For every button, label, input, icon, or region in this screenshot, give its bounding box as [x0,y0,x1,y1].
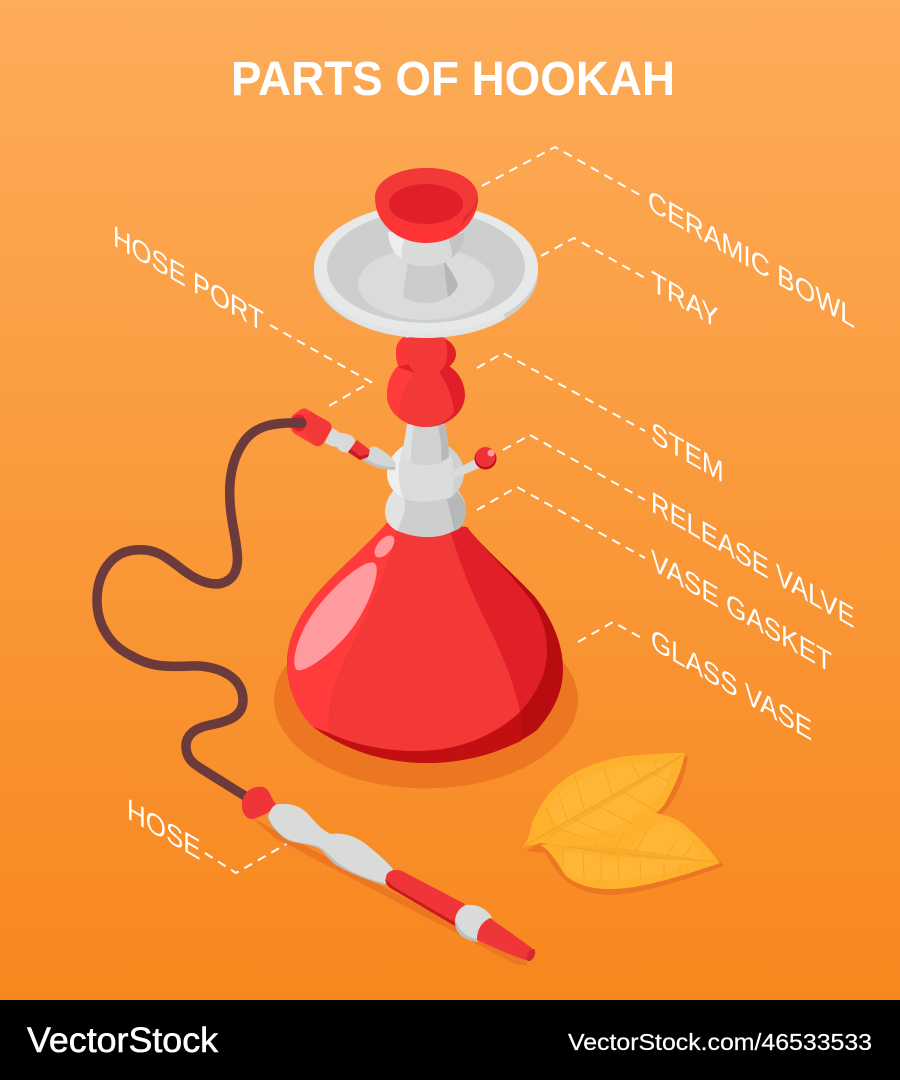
leaf shadows [526,756,724,895]
stem: red upper bulb [396,334,456,374]
vase gasket [385,488,466,537]
footer logo: VectorStock [27,1021,219,1060]
lower leaf [540,813,720,889]
label: ceramic bowl [482,147,855,336]
label: vase gasket [477,487,832,681]
stem: upper silver neck [403,424,449,465]
ceramic bowl [375,168,478,243]
label: tray: TRAY [651,265,719,336]
bowl cup [388,232,465,266]
tray [314,204,538,338]
stem: middle silver ball [387,446,464,502]
footer image id: VectorStock.com/46533533 [568,1029,872,1055]
mouthpiece [242,787,537,966]
label: glass vase [578,622,812,748]
label: ceramic bowl: CERAMIC BOWL [648,184,855,336]
lower leaf midrib band [565,846,705,860]
title: PARTS OF HOOKAH [231,53,675,106]
label: hose port [113,220,371,407]
footer bar [0,1000,900,1080]
release valve [450,447,496,479]
label: stem [477,353,724,490]
tobacco leaves [522,753,724,895]
glass vase [287,523,563,763]
label: hose port: HOSE PORT [113,220,264,339]
mouthpiece shadow [252,818,527,966]
hose port [290,408,396,470]
vase floor shadow [274,612,578,788]
label: release valve [503,435,855,636]
stem: red lower bulb [387,338,465,427]
upper leaf veins [550,766,668,835]
label: stem: STEM [651,416,724,490]
label: release valve: RELEASE VALVE [651,486,855,636]
label: vase gasket: VASE GASKET [651,544,832,681]
lower leaf veins [546,825,718,881]
label: glass vase: GLASS VASE [651,623,812,748]
label: hose: HOSE [127,793,201,868]
hose [97,423,302,796]
label: tray [541,238,719,336]
upper leaf [522,753,685,847]
label: hose [127,793,288,873]
tray stem [394,258,458,303]
vase highlights [294,532,398,670]
